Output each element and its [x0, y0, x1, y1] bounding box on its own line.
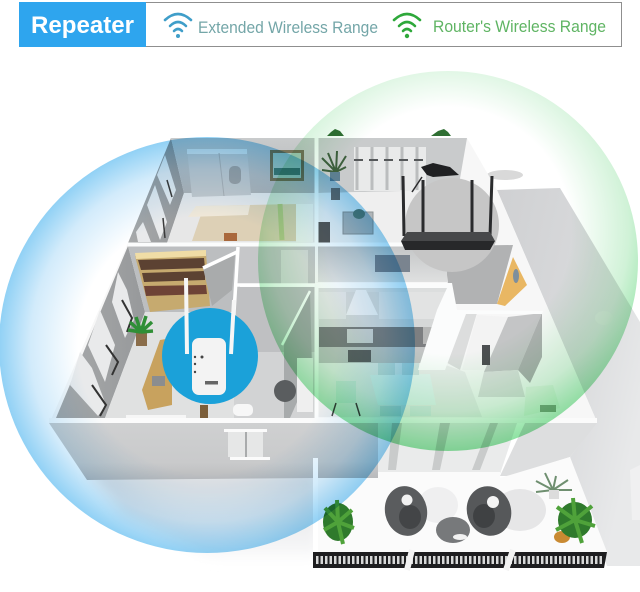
icon: green wifi: [394, 14, 420, 38]
door: orange: [497, 257, 527, 306]
plant: [128, 316, 153, 346]
table: [370, 374, 436, 405]
wardrobe: [187, 149, 251, 197]
repeater label: [19, 2, 146, 47]
plant back: [536, 473, 572, 499]
room: library and office: [56, 246, 270, 419]
seat shadows: [494, 489, 546, 531]
repeater label: Repeater: [31, 12, 134, 39]
room: kitchen: [318, 288, 482, 417]
painting: [270, 150, 304, 181]
railing: [313, 550, 607, 570]
router device: [401, 163, 499, 272]
room: hallway and bath: [203, 246, 318, 418]
extended range label: Extended Wireless Range: [198, 19, 378, 37]
plant left: [323, 500, 354, 544]
side table: [436, 517, 470, 543]
front wall: [49, 418, 597, 480]
chair: [336, 381, 356, 403]
rooftop plants: [327, 129, 451, 136]
room: central hall: [318, 245, 513, 304]
shower: [274, 380, 296, 402]
room: side office: [442, 312, 560, 416]
header legend: [19, 2, 622, 47]
bookshelf: [135, 253, 210, 312]
side desk: [524, 385, 560, 416]
plant: [322, 151, 346, 181]
icon: blue wifi: [165, 14, 191, 38]
router range label: Router's Wireless Range: [433, 18, 606, 36]
plant right: [554, 498, 595, 543]
coverage circle: blue: [0, 137, 415, 553]
legend frame: [20, 2, 622, 46]
floor plan: [49, 129, 607, 570]
house white base: [50, 138, 597, 422]
wall lines: [203, 247, 318, 345]
windows: [157, 155, 176, 205]
desk: [142, 338, 172, 410]
window: [224, 429, 270, 460]
bed: [192, 204, 298, 241]
windows: [112, 272, 134, 338]
ground shadow: [87, 170, 640, 566]
interior white walls: [128, 138, 543, 420]
seat right: [460, 480, 518, 542]
room: bedroom: [128, 138, 315, 243]
room: top right lounge: [318, 138, 497, 243]
balcony: [313, 457, 607, 570]
repeater device: [162, 278, 258, 404]
seat left: [380, 482, 432, 540]
coverage circle: green: [258, 71, 638, 451]
